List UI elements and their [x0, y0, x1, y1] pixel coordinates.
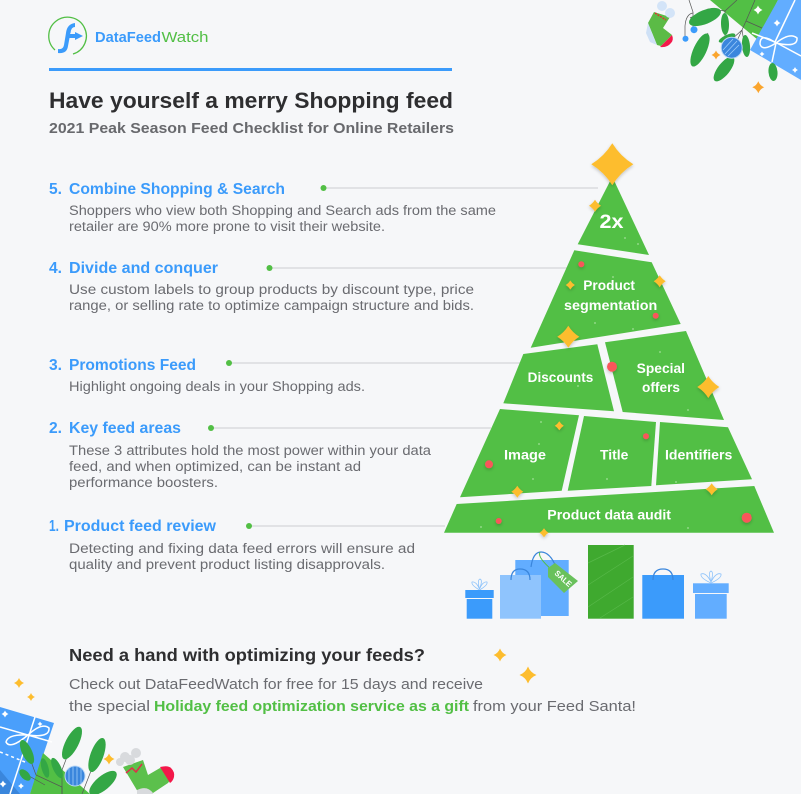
item 5: combine shopping and search [49, 181, 496, 234]
tree tier: discounts: Discounts [528, 370, 593, 385]
item 3: promotions feed [49, 357, 365, 394]
header rule [49, 68, 452, 71]
item 5: combine shopping and search: Shoppers who view both Shopping and Search ads from the same [69, 203, 496, 218]
icon: light blue gift [693, 571, 729, 619]
tree tier: product data audit [444, 486, 774, 533]
stars near call to action [494, 648, 536, 684]
icon: blue shopping bag [642, 569, 684, 619]
tree tier: discounts [503, 344, 614, 411]
tree tier: product segmentation: segmentation [564, 298, 657, 313]
logo: DataFeedWatch [49, 17, 208, 54]
logo: DataFeedWatch: DataFeed [95, 29, 161, 46]
item 3: promotions feed: Promotions Feed [69, 357, 196, 374]
icon: shopping bags with sale tag [500, 552, 578, 619]
leader line: key feed areas [208, 425, 491, 431]
call to action text: from your Feed Santa! [473, 698, 636, 715]
item 1: product feed review: Product feed review [64, 518, 217, 535]
item 5: combine shopping and search: retailer are 90% more prone to visit their website. [69, 219, 385, 234]
tree ornaments: red baubles [485, 261, 752, 524]
call to action text: Holiday feed optimization service as a gift [154, 698, 469, 715]
item 1: product feed review: Detecting and fixing data feed errors will ensure ad [69, 541, 415, 556]
item 1: product feed review: quality and prevent product listing disapprovals. [69, 557, 385, 572]
tree tier: special offers [605, 331, 724, 420]
decoration: bottom-left stocking [116, 748, 174, 794]
tree tier: product data audit: Product data audit [547, 508, 672, 522]
star: tree topper [591, 143, 633, 185]
item 3: promotions feed: 3. [49, 357, 62, 374]
leader line: divide and conquer [266, 265, 573, 271]
tree tier: identifiers: Identifiers [665, 448, 732, 462]
icon: tree trunk [588, 545, 634, 619]
icon: shopping bags with sale tag: SALE [553, 569, 574, 589]
tree tier: special offers: Special [637, 361, 685, 376]
item 4: divide and conquer: Use custom labels to group products by discount type, price [69, 282, 474, 297]
title: Have yourself a merry Shopping feed [49, 88, 453, 113]
icon: small blue gift [465, 579, 494, 619]
item 4: divide and conquer: range, or selling rate to optimize campaign structure and bids. [69, 298, 474, 313]
item 5: combine shopping and search: Combine Shopping & Search [69, 181, 285, 198]
tree tier: 2x: 2x [600, 211, 624, 233]
decoration: top-right holiday corner [682, 0, 801, 93]
leader line: combine shopping and search [320, 185, 598, 191]
item 4: divide and conquer: Divide and conquer [69, 260, 218, 277]
tree tier: 2x [578, 177, 649, 255]
call to action text: the special [69, 698, 150, 715]
item 2: key feed areas: 2. [49, 420, 62, 437]
logo: DataFeedWatch: Watch [162, 29, 208, 46]
tree tier: special offers: offers [642, 380, 680, 395]
item 3: promotions feed: Highlight ongoing deals in your Shopping ads. [69, 379, 365, 394]
item 1: product feed review: 1. [49, 518, 59, 535]
tree ornaments: gold stars [511, 200, 719, 537]
call to action heading: Need a hand with optimizing your feeds? [69, 645, 425, 665]
call to action text: Check out DataFeedWatch for free for 15 days and receive [69, 676, 483, 693]
call to action text [69, 676, 636, 715]
tree tier: product segmentation: Product [583, 278, 635, 293]
item 2: key feed areas: These 3 attributes hold the most power within your data [69, 443, 432, 458]
leader line: promotions feed [226, 360, 526, 366]
decoration: top-right stocking [646, 1, 675, 47]
tree tier: title [568, 416, 656, 491]
item 2: key feed areas: Key feed areas [69, 420, 181, 437]
decoration: bottom-left holiday corner [0, 678, 121, 794]
christmas tree pyramid [444, 177, 774, 533]
item 2: key feed areas: feed, and when optimized, can be instant ad [69, 459, 361, 474]
item 5: combine shopping and search: 5. [49, 181, 62, 198]
tree snow specks [480, 237, 689, 529]
tree tier: image: Image [504, 448, 547, 462]
item 4: divide and conquer [49, 260, 474, 313]
tree tier: product segmentation [531, 250, 681, 348]
tree tier: title: Title [600, 448, 629, 462]
item 2: key feed areas [49, 420, 432, 490]
item 1: product feed review [49, 518, 415, 572]
item 4: divide and conquer: 4. [49, 260, 62, 277]
leader line: product feed review [246, 523, 445, 529]
subtitle: 2021 Peak Season Feed Checklist for Online Retailers [49, 120, 454, 137]
tree tier: identifiers [656, 422, 752, 485]
tree tier: image [460, 409, 579, 497]
item 2: key feed areas: performance boosters. [69, 475, 218, 490]
